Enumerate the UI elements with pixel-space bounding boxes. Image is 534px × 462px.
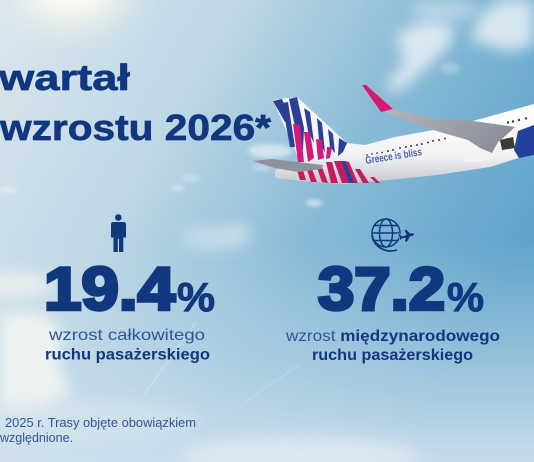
label: ruchu pasażerskiego: ruchu pasażerskiego bbox=[312, 347, 473, 364]
windows bbox=[366, 117, 527, 156]
left lower clouds bbox=[0, 272, 54, 298]
title bbox=[0, 57, 271, 148]
sun glow bbox=[20, 0, 124, 22]
bottom haze bbox=[180, 437, 420, 462]
contrails bbox=[143, 322, 196, 396]
icon: globe with airplane bbox=[372, 219, 415, 251]
label: ruchu pasażerskiego: ruchu pasażerskiego bbox=[45, 346, 210, 364]
horizontal stabilizer bbox=[253, 159, 323, 172]
livery slogan: Greece is bliss bbox=[365, 146, 423, 167]
wing bbox=[385, 107, 515, 153]
fuselage bbox=[275, 104, 534, 184]
label: wzrost całkowitego: wzrost całkowitego bbox=[48, 327, 205, 344]
value: 37.2%: 37.2 bbox=[318, 256, 445, 322]
title line 2: wzrostu 2026* bbox=[0, 107, 271, 148]
label: wzrost międzynarodowego: wzrost międzynarodowego bbox=[285, 328, 500, 345]
footnote line 2: względnione. bbox=[0, 431, 73, 445]
tail stripes bbox=[273, 97, 347, 156]
footnote bbox=[0, 416, 196, 445]
winglet bbox=[362, 85, 393, 112]
value: 37.2%: % bbox=[447, 274, 484, 320]
icon: person bbox=[111, 214, 126, 252]
tail fin bbox=[273, 97, 347, 162]
airplane bbox=[253, 85, 534, 184]
upper right clouds bbox=[385, 20, 455, 92]
statistic: total passenger traffic bbox=[44, 214, 215, 364]
fuselage stripes bbox=[297, 161, 380, 183]
footnote line 1: 2025 r. Trasy objęte obowiązkiem bbox=[5, 416, 196, 430]
value: 19.4% bbox=[44, 256, 215, 322]
title line 1: wartał bbox=[0, 57, 130, 98]
statistic: international passenger traffic bbox=[285, 219, 500, 364]
value: 19.4%: % bbox=[177, 274, 215, 320]
small clouds near aircraft bbox=[248, 144, 292, 158]
engine bbox=[514, 125, 534, 158]
value: 19.4%: 19.4 bbox=[44, 256, 176, 322]
